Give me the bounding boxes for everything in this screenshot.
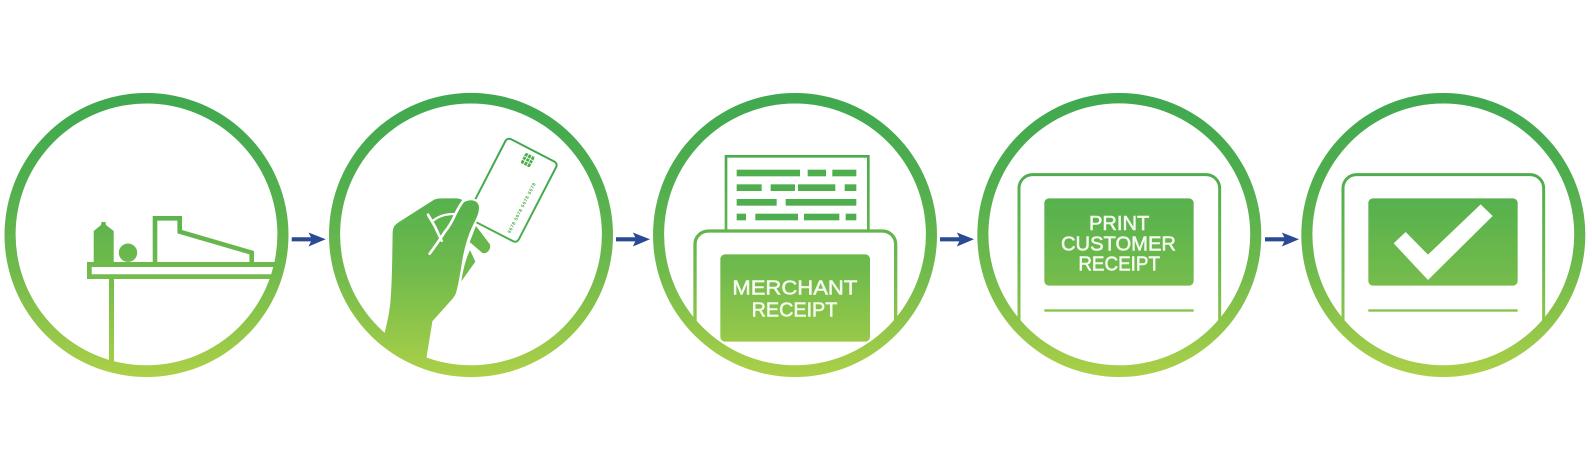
print customer receipt label box: RECEIPT	[1078, 254, 1160, 276]
merchant receipt label box	[720, 254, 870, 342]
merchant receipt label box: RECEIPT	[752, 300, 837, 322]
panel: step 5 approved	[1301, 93, 1585, 377]
receipt lines	[737, 170, 856, 220]
icon: terminal body	[695, 231, 896, 325]
icon: counter with bottle, ball and terminal	[87, 218, 277, 367]
icon: terminal body	[1343, 175, 1544, 327]
ring	[329, 93, 613, 377]
arrow 3	[940, 232, 974, 246]
ring	[1301, 93, 1585, 377]
icon: thumb and palm creases	[428, 200, 464, 254]
icon: printed receipt	[726, 156, 868, 230]
icon: counter leg	[109, 279, 114, 367]
icon: terminal body	[1019, 175, 1220, 327]
arrow 1	[292, 232, 326, 246]
print customer receipt label box: PRINT	[1089, 213, 1149, 235]
ring	[4, 93, 288, 377]
print customer receipt label box: CUSTOMER	[1061, 233, 1176, 255]
ring	[977, 93, 1261, 377]
merchant receipt label box: MERCHANT	[732, 277, 857, 299]
panel: step 4 print customer receipt	[977, 93, 1261, 377]
print customer receipt label box	[1044, 198, 1194, 286]
icon: ball	[119, 244, 137, 262]
panel: step 2 hand holding card	[329, 93, 613, 377]
card number: 5678 5678 5678 5678	[507, 182, 537, 234]
signature line	[1044, 309, 1194, 312]
icon: payment card	[466, 137, 558, 243]
icon: counter top	[87, 262, 277, 279]
panel: step 3 merchant receipt	[653, 93, 937, 377]
ring	[653, 93, 937, 377]
icon: card terminal outline	[155, 218, 252, 262]
icon: bottle	[94, 222, 114, 262]
icon: hand	[383, 197, 480, 363]
icon: fingers behind card	[461, 226, 490, 281]
arrow 2	[616, 232, 650, 246]
icon: card chip	[520, 152, 535, 168]
approved box with check mark	[1368, 198, 1518, 286]
panel: step 1 terminal on counter	[4, 93, 288, 377]
arrow 4	[1265, 232, 1299, 246]
signature line	[1368, 309, 1518, 312]
